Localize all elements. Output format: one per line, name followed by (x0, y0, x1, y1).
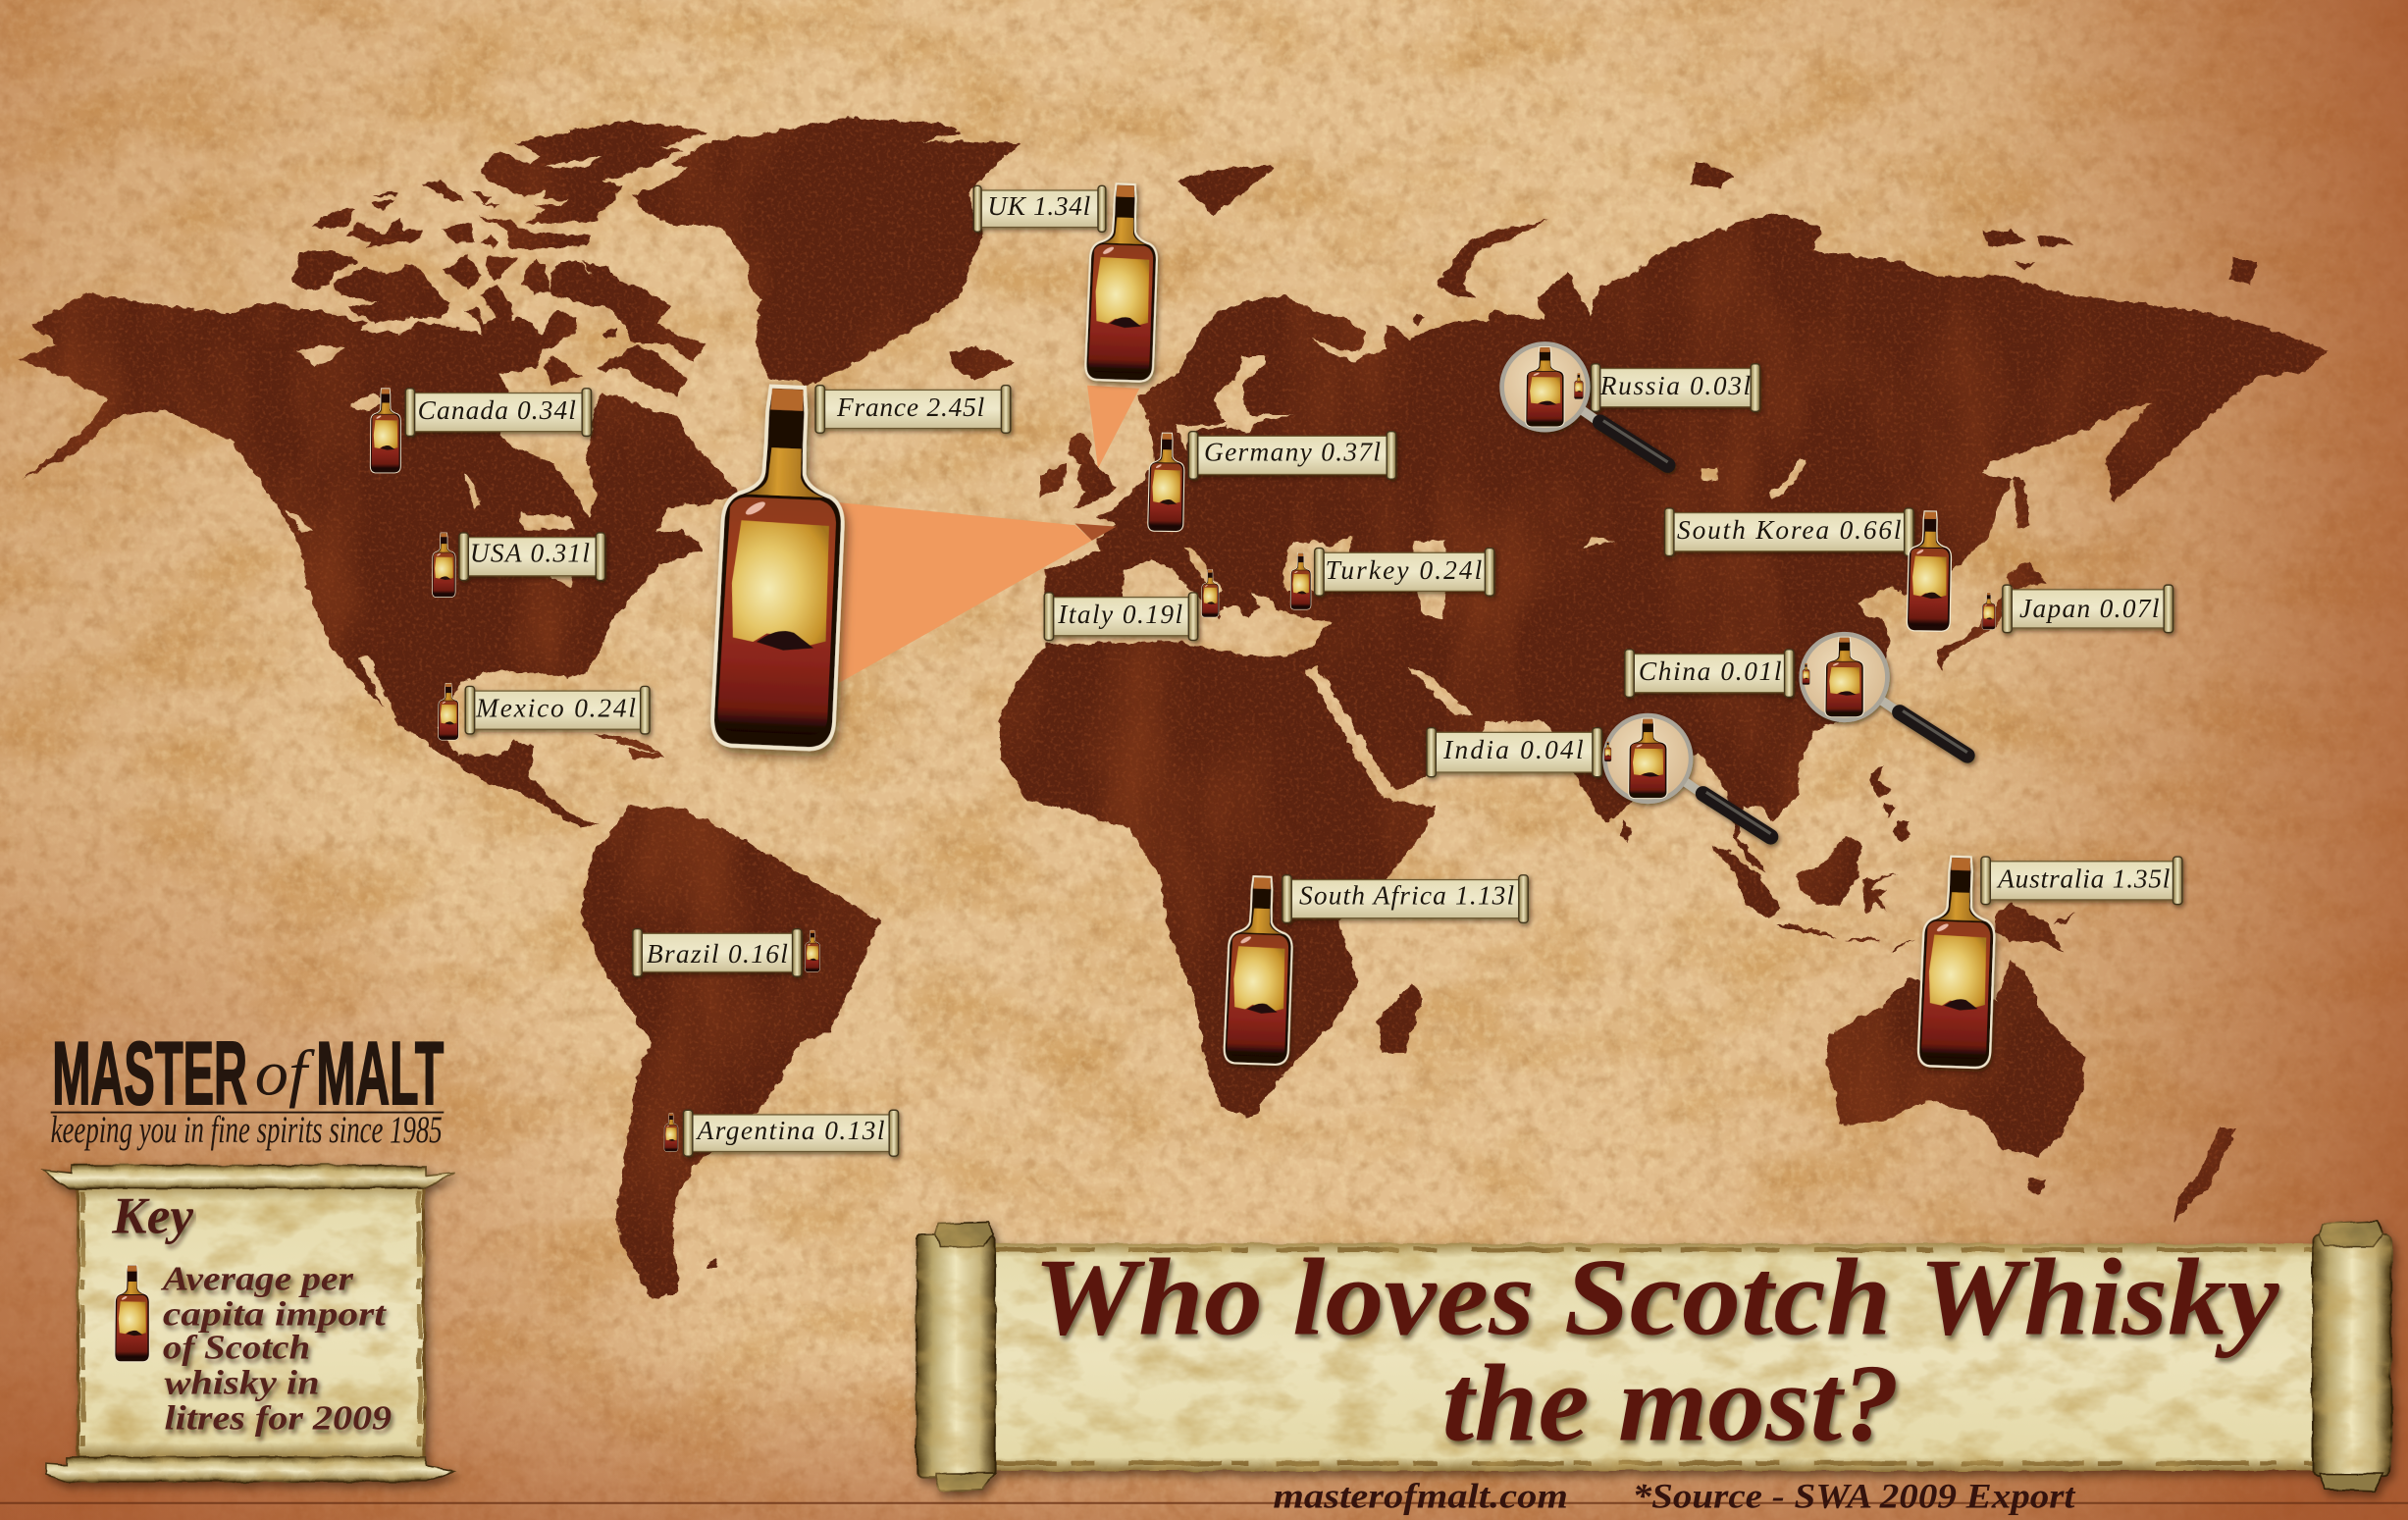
key description: of Scotch (163, 1329, 310, 1367)
bottle: China small (1803, 663, 1809, 685)
British Isles (1040, 432, 1115, 508)
key description: capita import (163, 1294, 387, 1333)
panel: title scroll (916, 1221, 2391, 1491)
Greenland (633, 118, 1021, 384)
label: UK (973, 185, 1106, 232)
title text: the most? (1442, 1343, 1900, 1465)
logo: Master of Malt: MALT (316, 1024, 444, 1124)
Africa (998, 642, 1436, 1118)
label: Canada (405, 389, 592, 436)
label: Mexico: Mexico 0.24l (475, 694, 636, 723)
label: USA (459, 533, 605, 580)
bottle: South Korea (1907, 511, 1952, 631)
key description: Average per (161, 1259, 353, 1297)
label: South Korea (1665, 508, 1913, 555)
Australia (1824, 958, 2084, 1158)
bottle: Australia (1917, 856, 1997, 1069)
bottle: Italy (1202, 569, 1219, 617)
key bottle icon (115, 1265, 149, 1362)
label: Argentina (683, 1110, 899, 1156)
wedge: France value pointer (834, 502, 1117, 683)
bottle: Russia small (1574, 373, 1584, 399)
key heading: Key (111, 1186, 193, 1244)
bottle: Germany (1148, 433, 1184, 532)
islands: Arctic and others (595, 161, 2258, 1268)
label: South Africa (1283, 875, 1528, 922)
title text: Who loves Scotch Whisky (1033, 1237, 2280, 1359)
title text (1033, 1237, 2280, 1465)
bottle: Canada (370, 389, 400, 473)
label: Brazil: Brazil 0.16l (647, 939, 788, 969)
logo: Master of Malt: keeping you in fine spirits since 1985 (51, 1109, 443, 1151)
key description: whisky in (164, 1364, 320, 1402)
label: Japan (2003, 585, 2173, 633)
magnifier: Russia (1502, 343, 1668, 465)
wedge: UK value pointer (1087, 386, 1139, 468)
label: Australia: Australia 1.35l (1996, 864, 2170, 893)
footer: source: *Source - SWA 2009 Export (1633, 1476, 2075, 1515)
label: France: France 2.45l (836, 393, 984, 422)
magnifier: India (1604, 715, 1771, 837)
continent: North America (19, 284, 737, 829)
label: Canada: Canada 0.34l (418, 395, 576, 425)
label: Australia (1981, 857, 2182, 905)
South America (581, 806, 880, 1300)
bottle: South Africa (1224, 875, 1294, 1065)
label: Brazil (633, 929, 802, 976)
bottle: Brazil (805, 930, 820, 971)
bottle: Mexico (439, 683, 458, 740)
label: Argentina: Argentina 0.13l (696, 1116, 884, 1145)
bottle: Argentina (664, 1113, 678, 1151)
label: India: India 0.04l (1442, 735, 1584, 764)
label: Mexico (465, 686, 650, 734)
label: China (1625, 650, 1794, 697)
logo: Master of Malt: MASTER (52, 1024, 247, 1124)
label: Italy (1044, 593, 1198, 640)
bottle: UK (1085, 183, 1160, 382)
label: Italy: Italy 0.19l (1057, 600, 1182, 629)
label: Germany: Germany 0.37l (1204, 437, 1381, 466)
logo: Master of Malt: of (255, 1038, 315, 1110)
label: Japan: Japan 0.07l (2019, 594, 2159, 623)
bottle: France (711, 385, 849, 750)
label: South Africa: South Africa 1.13l (1299, 881, 1514, 911)
world map (19, 118, 2329, 1300)
label: France (815, 386, 1011, 433)
label: Germany (1188, 432, 1396, 479)
bottle: Turkey (1290, 552, 1311, 609)
bottle: USA (432, 533, 455, 598)
panel: key scroll (43, 1166, 454, 1482)
label: Turkey (1315, 549, 1494, 596)
Canadian Arctic islands (291, 122, 707, 396)
label: China: China 0.01l (1639, 656, 1781, 686)
label: India (1427, 728, 1601, 777)
Eurasia (1046, 212, 2329, 872)
bottle: Japan (1982, 593, 1996, 630)
Iceland (948, 347, 1014, 379)
key description: litres for 2009 (164, 1399, 392, 1438)
islands: Asia Pacific (1620, 476, 2236, 1222)
bottle: India small (1604, 742, 1611, 761)
label: Turkey: Turkey 0.24l (1326, 555, 1482, 585)
footer: website: masterofmalt.com (1273, 1476, 1568, 1515)
label: South Korea: South Korea 0.66l (1677, 515, 1902, 545)
magnifier: China (1802, 634, 1967, 756)
key description (161, 1259, 392, 1438)
label: UK: UK 1.34l (987, 191, 1090, 221)
label: Russia: Russia 0.03l (1599, 371, 1751, 400)
label: Russia (1591, 364, 1760, 411)
label: USA: USA 0.31l (470, 539, 590, 568)
